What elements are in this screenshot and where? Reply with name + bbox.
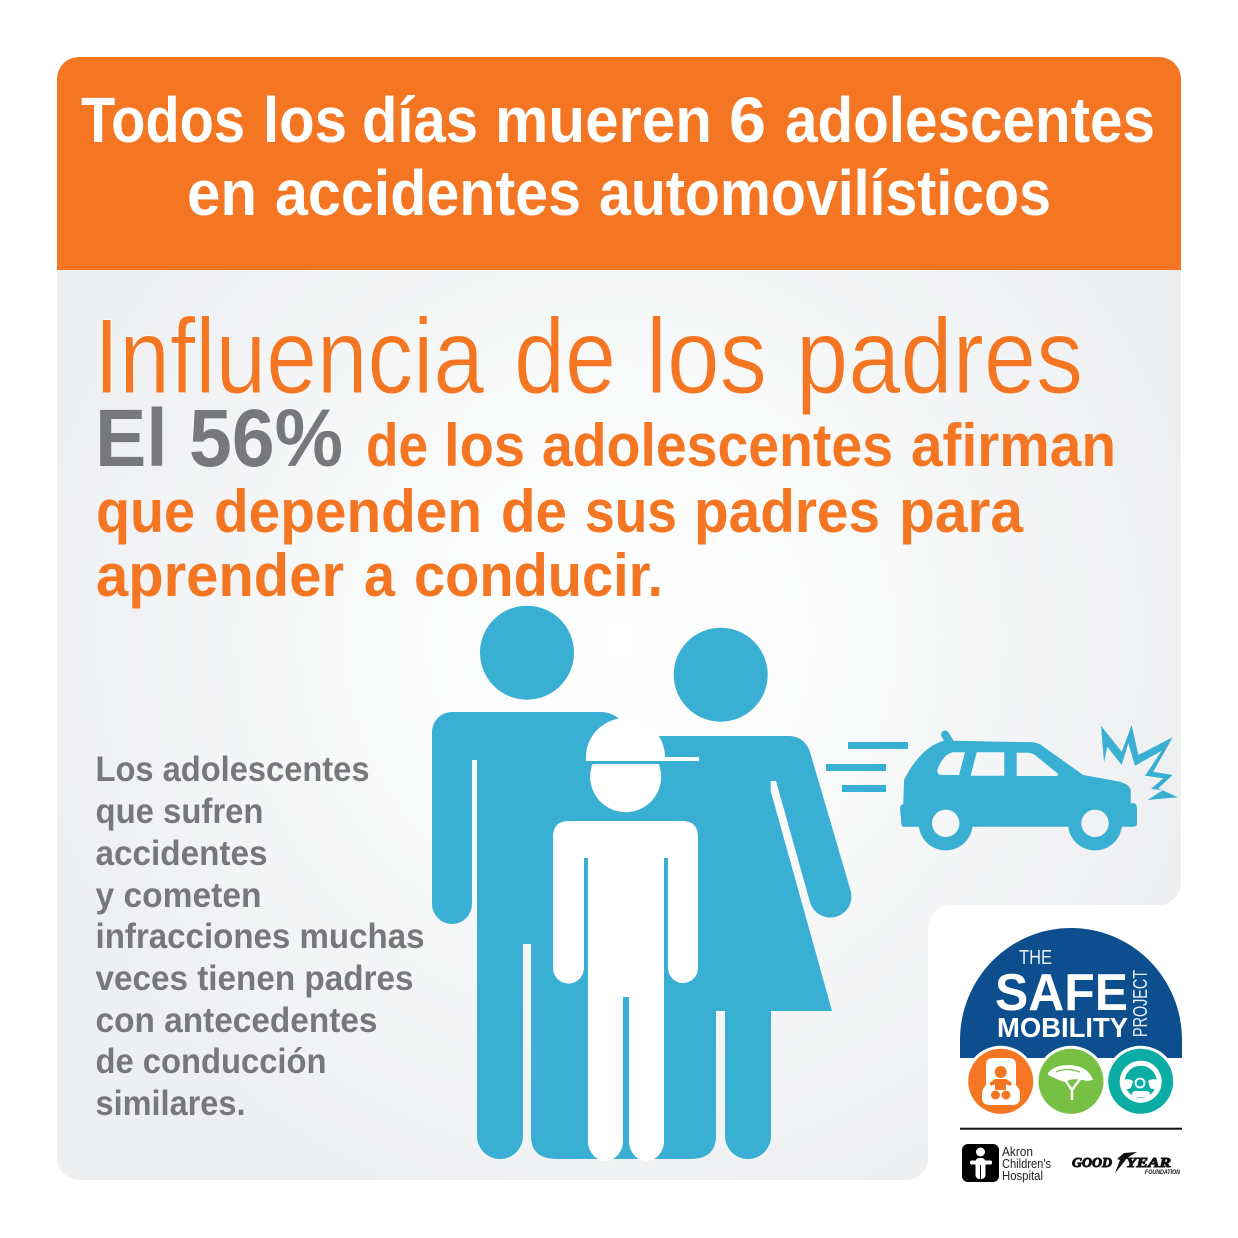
statistic line 1 (366, 412, 1116, 479)
side paragraph: de conducción (96, 1042, 326, 1081)
statistic line 2: de (501, 478, 567, 545)
statistic line 2: para (899, 478, 1024, 545)
divider (960, 1128, 1182, 1130)
heading: los (646, 296, 767, 416)
heading: de (514, 296, 616, 416)
statistic line 3: aprender (96, 542, 344, 609)
heading: Influencia (94, 296, 484, 416)
logo: Safe Mobility Project (960, 928, 1182, 1183)
title line 1: Todos (81, 84, 245, 156)
statistic line 2: que (96, 478, 195, 545)
title line 1: días (362, 84, 478, 156)
logo: Akron Children's Hospital (962, 1144, 1051, 1183)
title line 2: accidentes (275, 157, 581, 229)
side paragraph: con antecedentes (96, 1001, 378, 1040)
side paragraph: que sufren (96, 792, 264, 831)
logo text (995, 947, 1152, 1043)
logo text: PROJECT (1130, 970, 1152, 1037)
title line 2: en (187, 157, 257, 229)
statistic line 1: afirman (911, 412, 1116, 479)
logo dome (960, 928, 1182, 1058)
statistic line 3: a (364, 542, 396, 609)
statistic line 1: adolescentes (542, 412, 893, 479)
logo: Goodyear Foundation: FOUNDATION (1145, 1170, 1181, 1176)
side paragraph: Los adolescentes (96, 750, 370, 789)
logo text: THE (1019, 947, 1052, 969)
heading (94, 296, 1083, 416)
icon: bike helmet (1036, 1046, 1106, 1117)
title line 1 (81, 84, 1155, 156)
logo: Akron Children's Hospital: Hospital (1002, 1169, 1043, 1183)
title line 1: mueren (495, 84, 712, 156)
statistic line 2: padres (694, 478, 880, 545)
icon: steering wheel (1105, 1046, 1176, 1117)
side paragraph: accidentes (96, 834, 268, 873)
statistic line 3 (96, 542, 663, 609)
statistic line 1: los (444, 412, 525, 479)
title line 1: 6 (729, 84, 766, 156)
panel: orange header (57, 57, 1181, 270)
logo: Akron Children's Hospital: Children's (1002, 1157, 1051, 1171)
panel: background (57, 270, 1181, 1180)
icon: child seat (965, 1046, 1036, 1117)
statistic line 1: de (366, 412, 428, 479)
logo: Akron Children's Hospital: Akron (1002, 1145, 1033, 1159)
title line 2: automovilísticos (599, 157, 1051, 229)
statistic line 2: sus (585, 478, 677, 545)
logo text: MOBILITY (997, 1012, 1128, 1043)
side paragraph: y cometen (96, 876, 262, 915)
statistic line 2: dependen (214, 478, 482, 545)
icon: crash burst (1101, 725, 1178, 800)
side paragraph (96, 750, 424, 1123)
icon: speed lines (826, 742, 908, 792)
figure: woman (620, 628, 851, 1159)
logo: Goodyear Foundation: GOOD (1072, 1156, 1112, 1171)
percentage: El 56% (95, 393, 343, 484)
logo: Goodyear Foundation: YEAR (1126, 1156, 1171, 1171)
icon: car (900, 734, 1137, 850)
icon: family figures (432, 606, 851, 1161)
side paragraph: similares. (96, 1084, 246, 1123)
title line 1: los (263, 84, 347, 156)
logo text: SAFE (995, 964, 1128, 1022)
statistic text (95, 393, 1116, 609)
heading: padres (796, 296, 1083, 416)
side paragraph: infracciones muchas (96, 917, 424, 956)
title line 1: adolescentes (785, 84, 1155, 156)
title line 2 (187, 157, 1051, 229)
statistic line 3: conducir. (414, 542, 663, 609)
figure: child (553, 718, 699, 1161)
figure: man (432, 606, 716, 1159)
statistic line 2 (96, 478, 1024, 545)
side paragraph: veces tienen padres (96, 959, 414, 998)
logo: Goodyear Foundation (1072, 1152, 1181, 1176)
